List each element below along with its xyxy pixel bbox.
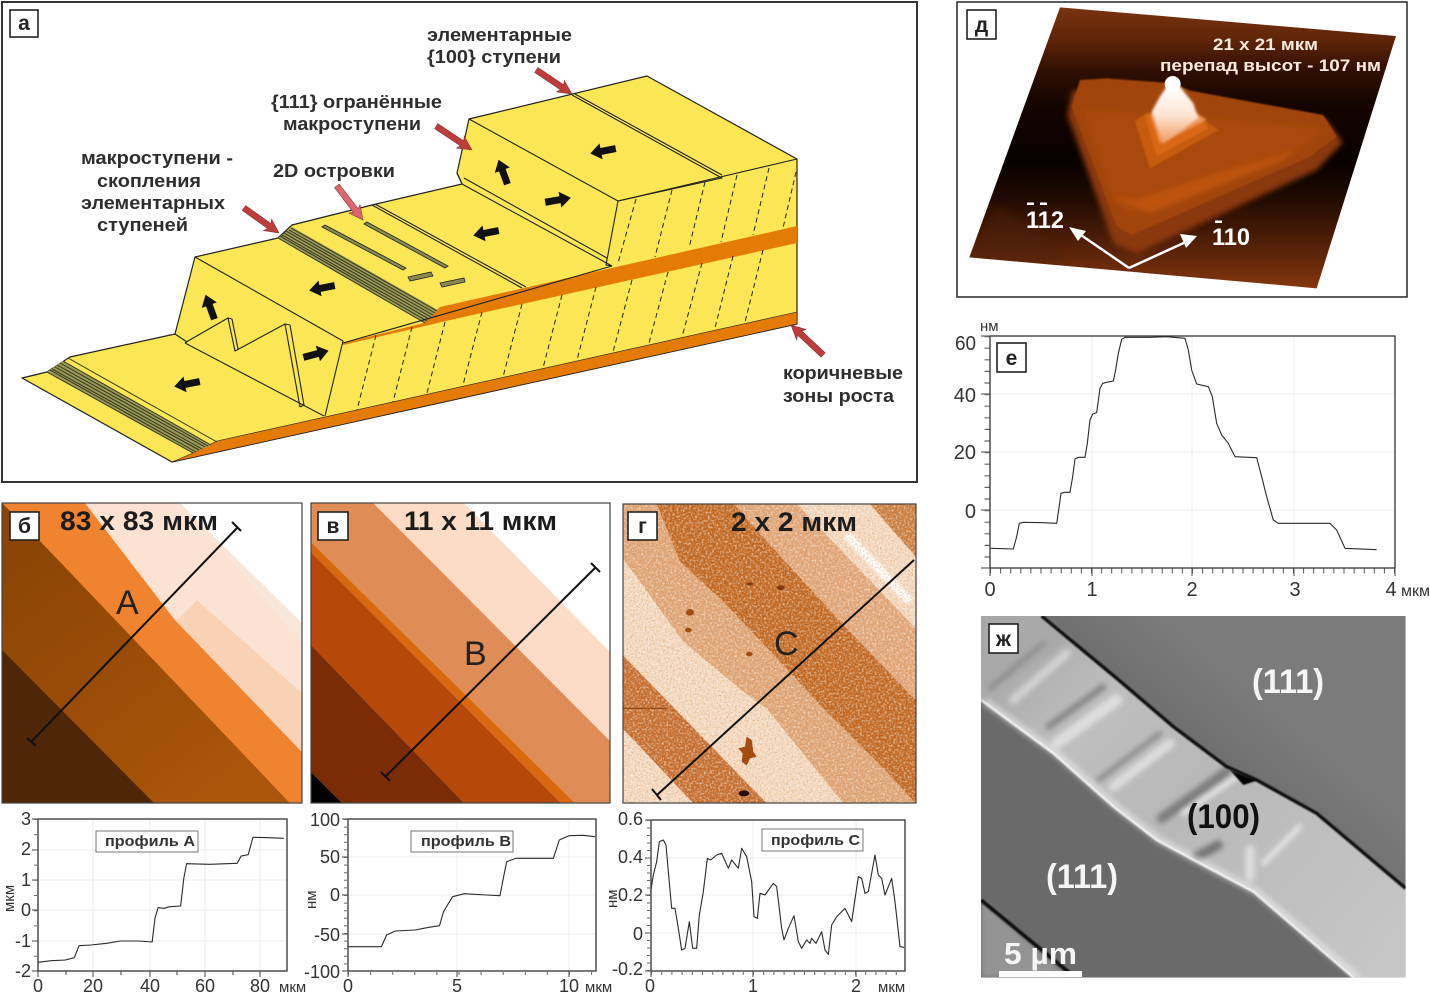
profile line A [27,522,241,746]
panel а: block diagram of growth steps [2,2,917,482]
yellow crystal block [22,76,797,462]
axis labels B: -50 [314,925,340,945]
label а [10,10,38,37]
axis labels C: 0.6 [618,809,643,829]
crystallographic directions: 110 [1212,224,1250,251]
axis labels B: нм [303,890,320,909]
title 2 x 2 мкм: 2 x 2 мкм [731,507,857,537]
frame г [623,504,916,803]
panel в: AFM 11x11 [311,503,610,803]
label б: б [18,515,31,538]
grid [990,336,1394,568]
axis labels: нм [980,318,999,335]
frame в [311,503,610,803]
axis labels: 1 [1086,579,1098,601]
axes [32,819,287,977]
axis labels A: мкм [1,885,18,912]
chart: профиль A [1,809,306,993]
axis labels A: 2 [21,839,31,859]
axis labels B: 100 [310,810,340,830]
callouts: зоны роста [783,386,895,406]
axis labels: 20 [954,442,976,464]
legend профиль A [96,831,198,852]
scale bar: 5 µm [1004,936,1077,971]
axis labels A: 1 [21,870,31,890]
axis labels: 3 [1289,579,1301,601]
curve B [348,835,595,947]
title 83 x 83 мкм: 83 x 83 мкм [60,506,218,536]
label в [318,512,348,540]
axis labels: 4 [1385,579,1397,601]
label ж [989,624,1018,653]
block edges [175,94,797,416]
callouts [81,25,903,406]
dashed slip lines [357,168,796,410]
label ж: ж [995,628,1012,651]
axis labels B [303,810,612,993]
panel а frame [2,2,917,482]
axis labels C: нм [604,889,621,908]
axes [342,819,596,977]
legend профиль C: профиль С [771,832,860,849]
label д [967,10,996,39]
curve C [651,840,904,954]
upper macrostep stack [278,227,438,323]
panel г: AFM 2x2 [623,504,916,803]
lower macrostep stack [47,358,217,453]
axes [645,820,905,977]
chart: профиль B [303,810,612,993]
grid [38,819,287,971]
title 11 x 11 мкм: 11 x 11 мкм [404,506,557,536]
letter B: B [464,635,487,673]
legend профиль B [411,831,513,852]
middle brown growth zone [343,226,797,345]
callouts: ступеней [97,215,188,235]
axes frame and ticks [981,336,1395,576]
label е: е [1006,347,1017,370]
profile line B [381,563,600,781]
callouts: {111} огранённые [271,92,442,112]
panel ж: SEM micrograph [981,616,1406,978]
axis labels: 0 [984,579,996,601]
callouts: элементарные [427,25,572,45]
axis labels C: -0.2 [612,959,643,979]
3D surface [969,7,1396,288]
chart: профиль C [604,809,905,993]
callouts: коричневые [783,363,903,383]
legend профиль A: профиль А [105,833,195,850]
axis labels A: -2 [15,961,31,981]
label в: в [327,515,340,538]
callouts: макроступени - [81,148,233,168]
label е [997,343,1026,372]
label д: д [975,14,988,37]
axis labels C: 0.4 [618,847,643,867]
axis labels B: 50 [320,847,340,867]
panel е: height profile chart [954,318,1430,601]
axis labels C [604,809,905,993]
axis labels B: -100 [304,962,340,982]
callouts: макроступени [283,114,421,134]
AFM image в [311,503,610,803]
profile curve [991,337,1377,550]
crystallographic directions [1026,202,1250,268]
axis labels: 2 [1186,579,1198,601]
caption: scan size and height [1160,35,1381,75]
caption: scan size and height: перепад высот - 107 нм [1160,56,1381,75]
legend профиль B: профиль В [421,833,511,850]
axis labels B: 0 [330,885,340,905]
axis labels A: 0 [21,900,31,920]
grid [651,820,905,971]
panel д frame [957,2,1407,297]
caption: scan size and height: 21 х 21 мкм [1213,35,1318,54]
2D islands [322,222,465,287]
label г [628,512,657,540]
profile line C [652,560,914,800]
letter C: C [774,625,799,663]
axis labels: 0 [965,501,976,523]
curve A [38,837,284,962]
frame б [2,503,302,803]
callouts: элементарных [81,193,225,213]
label а: а [18,12,30,35]
red pointer arrows [240,64,828,360]
facet index labels [1046,663,1324,896]
axis labels C: 0.2 [618,885,643,905]
SEM image [981,616,1406,978]
axis labels: мкм [1401,583,1430,600]
axis labels: 40 [954,385,976,407]
legend профиль C [762,829,863,851]
axis labels: 60 [955,333,976,355]
panel б: AFM 83x83 [2,503,302,803]
black direction arrows [173,141,617,394]
grid [348,819,596,971]
axis labels C: 0 [633,924,643,944]
facet index labels: (111) [1046,858,1118,896]
lower brown growth zone [172,312,797,462]
label г: г [638,515,647,538]
AFM image г [623,504,916,803]
label б [10,512,39,540]
facet index labels: (100) [1187,798,1260,836]
letter A: A [116,584,139,622]
axis labels A: 3 [21,809,31,829]
axis labels A [1,809,306,993]
callouts: скопления [97,171,201,191]
crystallographic directions: 112 [1026,207,1064,234]
callouts: {100} ступени [427,47,561,67]
facet index labels: (111) [1252,663,1324,701]
AFM image б [2,503,302,803]
panel д: 3D AFM image [957,2,1407,297]
axis labels A: -1 [15,931,31,951]
callouts: 2D островки [273,161,395,181]
axis labels [954,318,1430,601]
